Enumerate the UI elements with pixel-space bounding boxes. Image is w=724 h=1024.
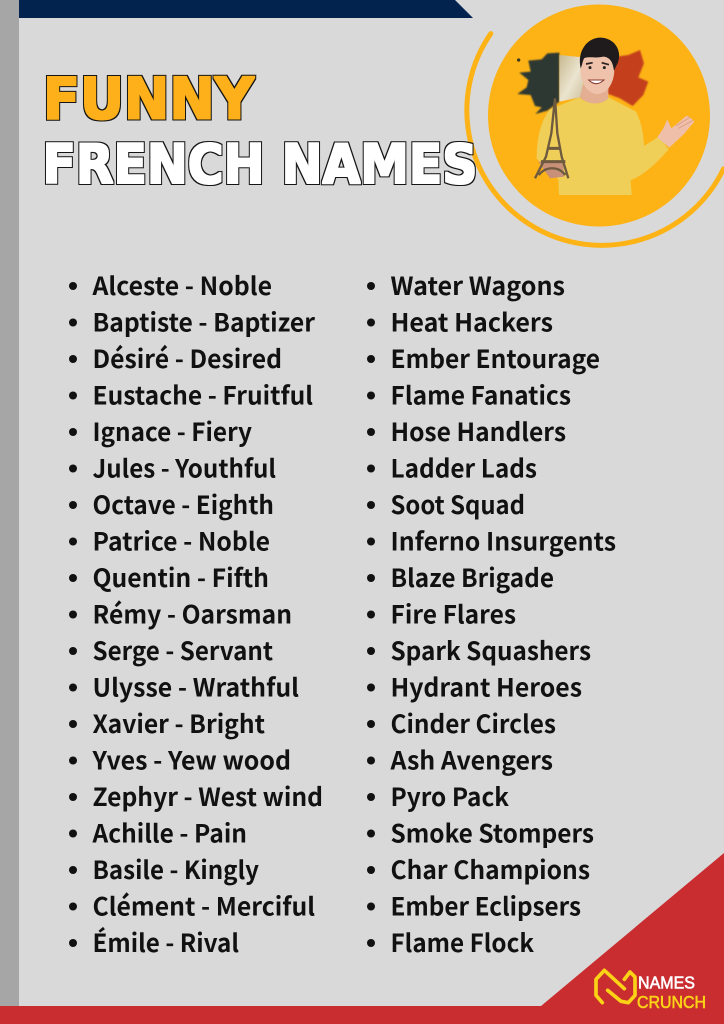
left column: names and meanings: Xavier - Bright xyxy=(92,705,265,741)
left column: names and meanings: Serge - Servant xyxy=(92,632,273,668)
right column: team names: Hydrant Heroes xyxy=(390,668,582,704)
right column: team names: Pyro Pack xyxy=(390,778,509,814)
right column: team names: Ember Eclipsers xyxy=(390,888,581,924)
right column: team names: Ember Entourage xyxy=(390,340,600,376)
left column: names and meanings: Émile - Rival xyxy=(92,924,239,960)
title line: FRENCH NAMES: FRENCH NAMES xyxy=(42,133,478,196)
French flag splash xyxy=(517,50,648,114)
logo wordmark: CRUNCH: CRUNCH xyxy=(637,992,706,1012)
right column: team names: Ash Avengers xyxy=(390,742,553,778)
smile xyxy=(589,80,604,84)
left column: names and meanings: Quentin - Fifth xyxy=(92,559,269,595)
right column: team names: Smoke Stompers xyxy=(390,814,594,850)
Eiffel Tower xyxy=(535,98,568,178)
face xyxy=(580,46,614,94)
right column: team names: Spark Squashers xyxy=(390,632,591,668)
left column: names and meanings: Alceste - Noble xyxy=(92,267,272,303)
logo wordmark: NAMES: NAMES xyxy=(638,972,695,992)
left column: names and meanings: Clément - Merciful xyxy=(92,888,315,924)
right column: team names: Cinder Circles xyxy=(390,705,556,741)
left column: names and meanings: Désiré - Desired xyxy=(92,340,282,376)
logo icon xyxy=(596,970,635,1003)
left column: names and meanings xyxy=(69,267,323,960)
left column: names and meanings: Eustache - Fruitful xyxy=(92,376,313,412)
right column: team names: Water Wagons xyxy=(390,267,565,303)
right column: team names: Blaze Brigade xyxy=(390,559,554,595)
right column: team names: Hose Handlers xyxy=(390,413,566,449)
title xyxy=(42,66,478,196)
raised hand xyxy=(657,116,694,148)
left side bar xyxy=(0,0,19,1024)
right column: team names: Flame Flock xyxy=(390,924,534,960)
left column: names and meanings: Basile - Kingly xyxy=(92,851,260,887)
sweater xyxy=(537,97,669,195)
right column: team names: Fire Flares xyxy=(390,596,516,632)
left column: names and meanings: Zephyr - West wind xyxy=(92,778,323,814)
orange circle xyxy=(488,4,710,226)
left column: names and meanings: Octave - Eighth xyxy=(92,486,274,522)
left column: names and meanings: Jules - Youthful xyxy=(92,450,276,486)
decorative orange ring xyxy=(467,34,724,245)
logo: Names Crunch xyxy=(596,970,706,1012)
right column: team names xyxy=(367,267,616,960)
title line: FUNNY: FUNNY xyxy=(43,66,255,132)
hair xyxy=(580,38,619,71)
top navy banner xyxy=(19,0,473,18)
right column: team names: Char Champions xyxy=(390,851,590,887)
right column: team names: Flame Fanatics xyxy=(390,376,571,412)
right column: team names: Ladder Lads xyxy=(390,450,537,486)
left column: names and meanings: Yves - Yew wood xyxy=(92,742,291,778)
neck xyxy=(580,85,608,103)
illustration: man with Eiffel Tower on orange circle xyxy=(488,4,710,226)
left column: names and meanings: Baptiste - Baptizer xyxy=(92,304,315,340)
bottom red band and corner xyxy=(0,853,724,1024)
left column: names and meanings: Ulysse - Wrathful xyxy=(92,668,299,704)
left column: names and meanings: Patrice - Noble xyxy=(92,522,270,558)
right column: team names: Soot Squad xyxy=(390,486,525,522)
left column: names and meanings: Achille - Pain xyxy=(92,814,247,850)
right column: team names: Heat Hackers xyxy=(390,304,553,340)
right column: team names: Inferno Insurgents xyxy=(390,522,616,558)
eyes and brows xyxy=(586,63,609,65)
left column: names and meanings: Rémy - Oarsman xyxy=(92,596,292,632)
left column: names and meanings: Ignace - Fiery xyxy=(92,413,253,449)
holding hand xyxy=(538,162,564,178)
